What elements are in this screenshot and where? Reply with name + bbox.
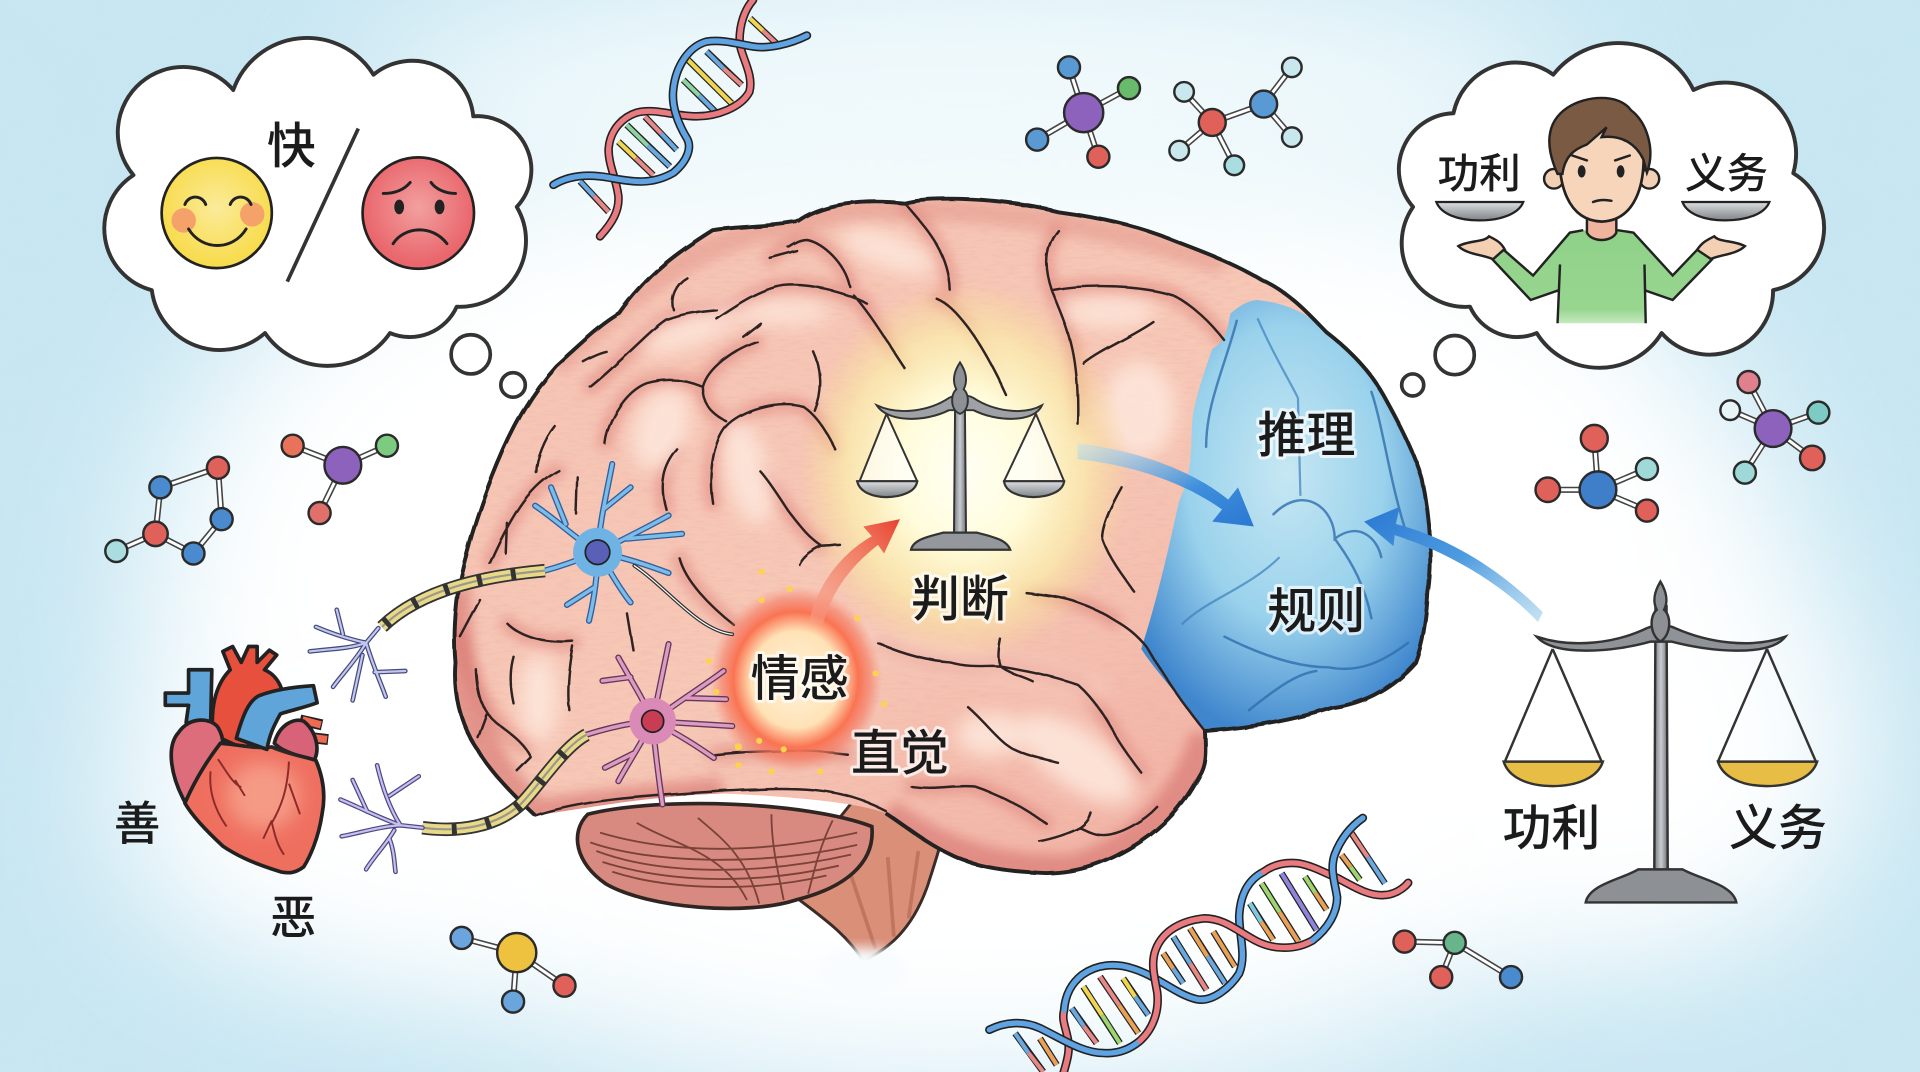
eyes and mouth	[1578, 165, 1586, 178]
atria	[171, 720, 223, 802]
molecule: right blue	[1536, 425, 1658, 522]
label: utility: 功利	[1438, 150, 1521, 197]
molecule: bottom green	[1393, 931, 1522, 988]
molecule: top purple	[1026, 56, 1140, 168]
panel: blue prefrontal region	[1141, 300, 1430, 731]
label: rules: 规则	[1267, 585, 1365, 639]
label: judgement: 判断	[911, 573, 1009, 627]
arrow: scale to rules	[1364, 507, 1543, 622]
icon: cerebellum	[577, 804, 872, 908]
small vessels	[300, 720, 328, 740]
aorta	[212, 647, 284, 749]
label: duty: 义务	[1685, 150, 1768, 197]
label: emotion: 情感	[751, 652, 849, 706]
icon: axon upper	[310, 571, 545, 700]
icon: brain stem	[784, 796, 945, 992]
panel: thought bubble dilemma	[1399, 43, 1824, 396]
icon: thought dots	[1402, 335, 1474, 396]
molecule: left purple	[282, 435, 398, 524]
pans	[1436, 202, 1769, 220]
molecule: right purple	[1720, 371, 1829, 484]
icon: emotion glow	[706, 569, 887, 774]
icon: sad face	[363, 157, 474, 269]
label: duty scale: 义务	[1729, 802, 1827, 856]
hands	[1458, 236, 1745, 260]
label: joy: 快	[267, 120, 316, 174]
panel: thought bubble emotion	[104, 38, 531, 397]
molecule: top red blue	[1169, 58, 1302, 175]
arrow: emotion to judgement	[809, 519, 900, 624]
ears	[1544, 169, 1564, 189]
shirt	[1493, 230, 1712, 323]
arrow: judgement to reasoning	[1078, 443, 1254, 527]
temporal lobe light	[857, 637, 1102, 698]
molecule: left ring	[105, 457, 233, 564]
icon: happy face	[162, 158, 272, 268]
ventricles	[185, 743, 324, 873]
icon: small scale centre	[857, 362, 1064, 550]
label: reasoning: 推理	[1258, 409, 1356, 463]
icon: DNA helix bottom	[989, 818, 1408, 1072]
hair	[1549, 98, 1650, 174]
label: intuition: 直觉	[851, 727, 949, 781]
pulmonary artery	[236, 686, 317, 749]
icon: axon lower	[340, 735, 587, 872]
cortex shading	[455, 203, 1224, 871]
label: evil: 恶	[270, 892, 317, 944]
icon: neuron magenta	[587, 644, 732, 804]
icon: brain outline and sulci lines	[455, 199, 1430, 873]
icon: DNA helix top	[553, 0, 807, 236]
cortex highlights	[519, 218, 1176, 822]
label: good: 善	[114, 798, 160, 850]
icon: shrugging person	[1458, 98, 1745, 323]
vena cava	[165, 670, 212, 725]
face	[1560, 129, 1644, 222]
molecule: bottom yellow	[451, 927, 576, 1013]
judgement glow	[813, 292, 1120, 646]
label: utility scale: 功利	[1502, 802, 1600, 856]
icon: heart	[165, 647, 328, 873]
icon: brain cortex	[456, 200, 1310, 872]
pencil hatch texture	[508, 268, 1248, 768]
neck	[1587, 218, 1616, 240]
divider slash	[287, 129, 358, 282]
icon: balance scale right	[1504, 582, 1817, 902]
icon: neuron blue	[535, 464, 732, 634]
icon: thought dots	[451, 335, 525, 397]
